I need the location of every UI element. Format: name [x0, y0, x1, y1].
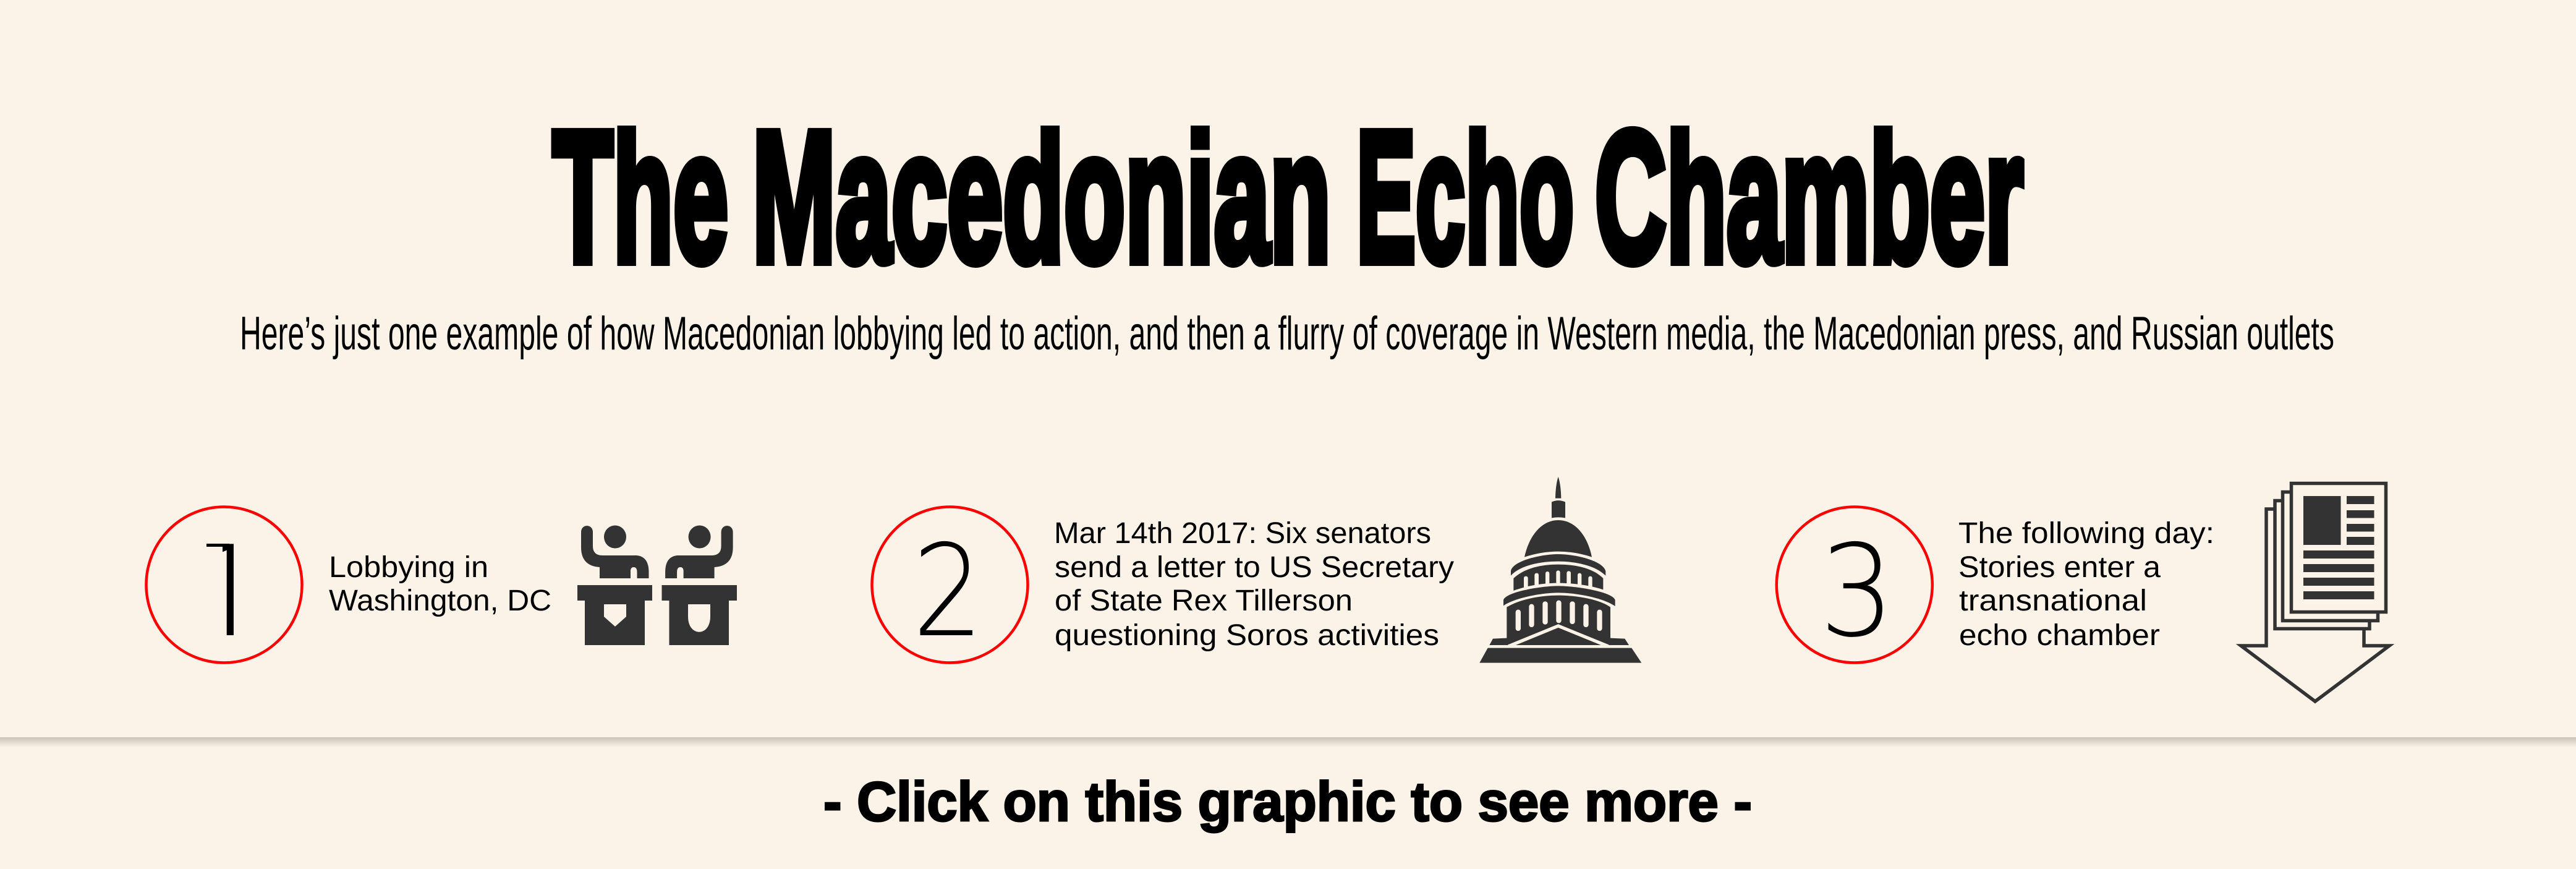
step 3 text: transnational [1959, 584, 2147, 617]
title: Chamber [1595, 93, 2023, 301]
step 2 text [1054, 517, 1454, 652]
icon: two people at podiums [577, 526, 737, 645]
step 1 text: Lobbying in [329, 551, 488, 584]
step 3 number circle [1777, 507, 1932, 666]
title: Macedonian [752, 93, 1331, 301]
step 1 number circle [146, 507, 302, 682]
icon: newspapers and down arrow [2241, 484, 2389, 701]
step 1 text [329, 551, 551, 617]
step 1 number circle: 1 [183, 516, 273, 682]
step 2 text: send a letter to US Secretary [1055, 551, 1454, 584]
step 2 number circle: 2 [912, 518, 984, 666]
step 3 text: echo chamber [1959, 619, 2160, 652]
title: Echo [1356, 93, 1574, 301]
title: The [553, 93, 728, 301]
step 1 text: Washington, DC [329, 584, 551, 617]
icon: capitol building [1479, 477, 1641, 663]
step 1: lobbying [146, 507, 737, 682]
step 2: senators letter [872, 477, 1641, 666]
call to action: - Click on this graphic to see more - [823, 771, 1752, 833]
step 3 text [1958, 517, 2214, 652]
step 2 text: Mar 14th 2017: Six senators [1054, 517, 1431, 550]
step 2 number circle [872, 507, 1027, 666]
step 3: echo chamber [1777, 484, 2389, 701]
footer divider shadow [0, 737, 2576, 747]
step 3 text: The following day: [1958, 517, 2214, 550]
step 3 number circle: 3 [1819, 518, 1895, 666]
step 2 text: of State Rex Tillerson [1055, 584, 1353, 617]
step 2 text: questioning Soros activities [1055, 619, 1439, 652]
step 3 text: Stories enter a [1958, 551, 2161, 584]
title [551, 126, 2025, 268]
